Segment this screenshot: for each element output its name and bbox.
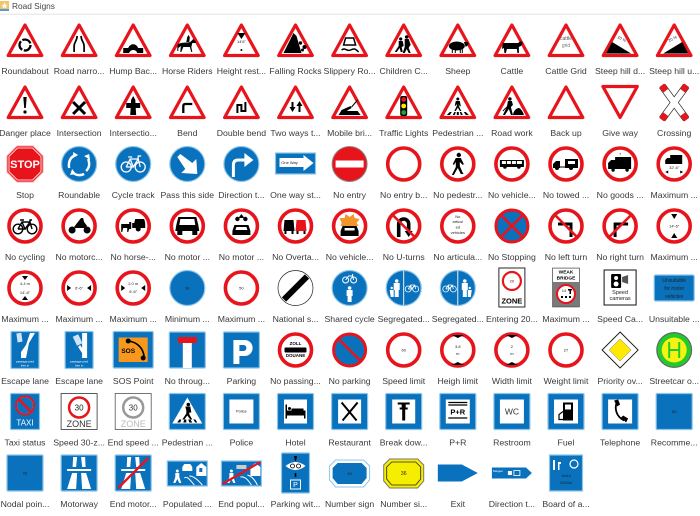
- sign: End populated area: End popul...: [218, 499, 265, 509]
- sign: Horse Riders: Horse Riders: [162, 66, 213, 76]
- sign: Escape lane right: passage pied: [70, 360, 88, 364]
- sign: Maximum height 14'6": 14'-6": [669, 224, 680, 228]
- sign: Weight limit: 27: [564, 348, 569, 352]
- sign: Direction to: [218, 146, 265, 200]
- sign: Police: Police: [236, 408, 248, 414]
- sign: Priority over: [597, 332, 643, 386]
- sign: No vehicles: [488, 148, 536, 200]
- sign: Minimum speed: [165, 270, 210, 324]
- sign: Number sign yellow: [380, 459, 427, 509]
- sign: Maximum height 14'6": Maximum ...: [651, 252, 698, 262]
- sign: Roundable: [58, 146, 100, 200]
- sign: Weight limit: [544, 334, 589, 386]
- sign: Falling Rocks: [269, 25, 322, 76]
- sign: Pedestrian crossing: [432, 87, 483, 138]
- sign: No articulated: No articula...: [433, 252, 482, 262]
- sign: Double bend: Double bend: [217, 128, 266, 138]
- sign: Height restriction: 14'6": [237, 39, 246, 44]
- sign: No articulated: vehicles: [451, 230, 465, 235]
- sign: Steep hill down: Steep hill d...: [595, 66, 645, 76]
- sign: No left turn: [545, 210, 587, 262]
- sign: Maximum speed 50: Maximum ...: [218, 314, 265, 324]
- sign: Number sign yellow: Number si...: [380, 499, 427, 509]
- sign: Height restriction: [217, 25, 266, 76]
- sign: Speed 30 zone: ZONE: [67, 419, 92, 429]
- sign: Escape lane right: free in: [75, 364, 84, 368]
- sign: No articulated: [433, 210, 482, 262]
- sign: Restaurant: Restaurant: [328, 438, 371, 448]
- sign: Segregated left: Segregated...: [378, 314, 430, 324]
- sign: Traffic Lights: Traffic Lights: [379, 128, 429, 138]
- sign: Stop: [7, 146, 43, 200]
- sign: Nodal point: Nodal poin...: [1, 499, 49, 509]
- sign: Unsuitable: [649, 275, 700, 324]
- sign: Number sign: Number sign: [325, 499, 374, 509]
- sign: No passing customs: ZOLL: [290, 341, 302, 346]
- sign: Taxi status: [4, 394, 46, 448]
- sign: Entering 20 zone: 20: [510, 278, 515, 284]
- sign: Nodal point: 28: [23, 470, 28, 476]
- sign: Number sign: 49: [347, 471, 353, 476]
- sign: No motor vehicles and motorcycles: No motor ...: [219, 252, 264, 262]
- sign: Parking with: P: [293, 482, 298, 489]
- sign: No parking: No parking: [329, 376, 371, 386]
- sign: Populated area: [163, 461, 212, 509]
- sign: Hump Back: [109, 25, 157, 76]
- sign: Board of areas: Wuhi: [561, 473, 571, 478]
- sign: SOS Point: [113, 332, 154, 386]
- sign: One way street: One Way: [281, 160, 298, 165]
- sign: Intersection: [57, 87, 102, 138]
- sign: Pedestrian crossing square: Pedestrian ...: [162, 438, 213, 448]
- sign: Road narrows: [54, 25, 104, 76]
- sign: Populated area: Populated ...: [163, 499, 212, 509]
- sign: Cattle Grid: [545, 25, 587, 76]
- sign: Escape lane right: [55, 332, 103, 386]
- sign: Police: [223, 394, 259, 448]
- sign: Speed 30 zone: Speed 30-z...: [53, 438, 105, 448]
- sign: Give way: [602, 86, 639, 138]
- sign: Maximum weak bridge: WEAK: [559, 270, 574, 276]
- sign: Nodal point: [1, 455, 49, 509]
- sign: Maximum weak bridge: [542, 268, 590, 324]
- sign: Telephone: Telephone: [600, 438, 640, 448]
- sign: No motorcycles: [55, 210, 103, 262]
- sign: Restaurant: [328, 394, 371, 448]
- sign: No parking: [329, 334, 371, 386]
- sign: Break down service: Break dow...: [380, 438, 428, 448]
- sign: Cattle: Cattle: [501, 66, 523, 76]
- sign: Unsuitable: Unsuitable: [662, 278, 686, 284]
- sign: Roundabout: [1, 25, 49, 76]
- sign: Intersection: Intersection: [57, 128, 102, 138]
- sign: Maximum weak bridge: 14: [562, 288, 567, 293]
- sign: Speed limit 60: Speed limit: [382, 376, 426, 386]
- sign: Minimum speed: Minimum ...: [165, 314, 210, 324]
- sign: No goods: 7: [619, 152, 622, 156]
- sign: No Stopping: [488, 210, 536, 262]
- sign: Steep hill up: Steep hill u...: [649, 66, 699, 76]
- sign: Priority over: Priority ov...: [597, 376, 643, 386]
- sign: Maximum width truck: 32'-6": [669, 165, 680, 170]
- sign: Stop: STOP: [10, 159, 40, 171]
- sign: Danger place: Danger place: [0, 128, 51, 138]
- sign: Break down service: [380, 394, 428, 448]
- sign: Taxi status: TAXI: [16, 418, 34, 428]
- sign: No right turn: [596, 210, 644, 262]
- icon: folder star: [0, 1, 9, 11]
- sign: End motorway: [110, 455, 157, 509]
- sign: Restroom: WC: [505, 406, 519, 416]
- sign: Cattle Grid: Cattle Grid: [545, 66, 587, 76]
- sign: Shared cycle: Shared cycle: [324, 314, 375, 324]
- sign: End speed zone: 30: [129, 404, 138, 412]
- sign: Pass this side: [160, 146, 214, 200]
- sign: Maximum 4.4 m: 14'-6": [20, 290, 31, 295]
- sign: No towed: [543, 148, 589, 200]
- sign: End speed zone: [108, 394, 159, 448]
- sign: Recommended speed: 80: [672, 409, 677, 414]
- sign: No cycling: No cycling: [5, 252, 45, 262]
- sign: Maximum width 6'-6": Maximum ...: [55, 314, 103, 324]
- sign: No entry: [332, 146, 367, 200]
- sign: No Stopping: No Stopping: [488, 252, 536, 262]
- sign: End speed zone: ZONE: [121, 419, 146, 429]
- sign: Bend: Bend: [177, 128, 198, 138]
- sign: Width limit: 2: [511, 344, 514, 349]
- sign: Fuel: Fuel: [558, 438, 575, 448]
- sign: Number sign yellow: 36: [401, 471, 407, 477]
- sign: No motor vehicles: [165, 210, 210, 262]
- sign: Pass this side: Pass this side: [160, 190, 214, 200]
- sign: Double bend: [217, 87, 266, 138]
- sign: Unsuitable: Unsuitable ...: [649, 314, 700, 324]
- sign: Exit: Exit: [451, 499, 466, 509]
- sign: Parking: [223, 332, 259, 386]
- sign: Pedestrian crossing square: [162, 394, 213, 448]
- sign: Direction to: Direction t...: [489, 499, 535, 509]
- sign: End populated area: [218, 461, 265, 509]
- sign: Board of areas: [542, 455, 590, 509]
- title: Road Signs: [12, 1, 55, 11]
- sign: One way street: [270, 153, 321, 200]
- sign: Police: Police: [230, 438, 253, 448]
- sign: SOS Point: SOS: [121, 348, 136, 355]
- sign: SOS Point: SOS Point: [113, 376, 154, 386]
- sign: Fuel: [548, 394, 584, 448]
- sign: Cattle Grid: cattle: [560, 36, 572, 42]
- sign: Steep hill down: 10 %: [617, 34, 627, 43]
- sign: Hotel: [278, 394, 314, 448]
- sign: No vehicles explosive: [326, 210, 374, 262]
- sign: No entry both: [380, 148, 427, 200]
- sign: Horse Riders: [162, 25, 213, 76]
- sign: No motor vehicles and motorcycles: [219, 210, 264, 262]
- sign: Children Crossing: [380, 25, 428, 76]
- sign: Speed Cameras: Speed Ca...: [597, 314, 643, 324]
- sign: Mobile bridge: Mobile bri...: [327, 128, 372, 138]
- sign: Road narrows: Road narro...: [54, 66, 104, 76]
- sign: Cattle: [495, 25, 529, 76]
- sign: Maximum speed 50: 50: [239, 286, 244, 290]
- sign: Escape lane left: passage pied: [16, 360, 34, 364]
- sign: Telephone: [600, 394, 640, 448]
- sign: Steep hill up: [649, 25, 699, 76]
- sign: Maximum width truck: [651, 148, 698, 200]
- sign: Height limit: m: [456, 351, 460, 356]
- sign: Roundabout: Roundabout: [1, 66, 49, 76]
- sign: Two ways traffic: Two ways t...: [270, 128, 321, 138]
- sign: No cycling: [5, 210, 45, 262]
- sign: No passing customs: [270, 334, 321, 386]
- sign: Speed 30 zone: 30: [75, 404, 84, 412]
- sign: P+R: P+R: [450, 408, 466, 416]
- sign: Segregated right: [432, 270, 484, 324]
- sign: Road work: Road work: [491, 128, 533, 138]
- sign: Maximum 4.4 m: 4.4 m: [20, 281, 31, 286]
- sign: Speed limit 60: 60: [401, 348, 407, 352]
- sign: Number sign: [325, 460, 374, 509]
- sign: Streetcar: [649, 332, 699, 386]
- sign: Speed Cameras: [597, 270, 643, 324]
- sign: No goods: No goods ...: [597, 190, 644, 200]
- sign: Unsuitable: for motor: [664, 286, 685, 292]
- sign: No motor vehicles: No motor ...: [165, 252, 210, 262]
- sign: Falling Rocks: Falling Rocks: [269, 66, 322, 76]
- sign: Height restriction: Height rest...: [217, 66, 266, 76]
- sign: Board of areas: 1000m: [560, 480, 573, 485]
- sign: Width limit: [492, 334, 533, 386]
- sign: P+R: P+R: [449, 438, 466, 448]
- sign: Crossing: [657, 85, 692, 138]
- sign: Cycle track: Cycle track: [112, 190, 155, 200]
- sign: Recommended speed: Recomme...: [651, 438, 698, 448]
- sign: No goods: [597, 148, 644, 200]
- sign: Streetcar: Streetcar o...: [649, 376, 699, 386]
- sign: Entering 20 zone: [486, 268, 538, 324]
- sign: Mobile bridge: [327, 87, 372, 138]
- sign: Direction to: Direction t...: [218, 190, 265, 200]
- sign: Sheep: [441, 25, 475, 76]
- sign: No right turn: No right turn: [596, 252, 644, 262]
- sign: Road work: [491, 87, 533, 138]
- sign: No articulated: articul: [452, 219, 463, 224]
- sign: Maximum weak bridge: BRIDGE: [557, 276, 576, 282]
- sign: Speed limit 60: [382, 334, 426, 386]
- sign: Bend: [170, 87, 204, 138]
- sign: Maximum height 14'6": [651, 210, 698, 262]
- sign: End speed zone: End speed ...: [108, 438, 159, 448]
- sign: Maximum width 2.0 m: Maximum ...: [110, 314, 157, 324]
- sign: Hump Back: Hump Bac...: [109, 66, 157, 76]
- sign: Entering 20 zone: ZONE: [501, 296, 522, 306]
- sign: No Overtaking: No Overta...: [272, 252, 319, 262]
- sign: One way street: One way st...: [270, 190, 321, 200]
- sign: Steep hill down: [595, 25, 645, 76]
- sign: No motorcycles: No motorc...: [55, 252, 103, 262]
- sign: Width limit: m: [510, 351, 514, 356]
- sign: No through road: No throug...: [165, 376, 210, 386]
- sign: Motorway: Motorway: [60, 499, 99, 509]
- sign: Steep hill up: 20 %: [667, 34, 678, 43]
- sign: No articulated: ed: [456, 224, 460, 230]
- sign: End motorway: End motor...: [110, 499, 157, 509]
- sign: Maximum weak bridge: Maximum ...: [542, 314, 590, 324]
- sign: National speed limit: National s...: [273, 314, 318, 324]
- sign: Pedestrian crossing: Pedestrian ...: [432, 128, 483, 138]
- sign: Children Crossing: Children C...: [380, 66, 428, 76]
- sign: Maximum width truck: Maximum ...: [651, 190, 698, 200]
- sign: Parking with: [271, 453, 320, 509]
- sign: Roundable: Roundable: [58, 190, 100, 200]
- sign: No pedestrians: No pedestr...: [433, 190, 482, 200]
- sign: Escape lane left: free in: [21, 364, 29, 368]
- sign: Two ways traffic: [270, 87, 321, 138]
- sign: Direction to: [489, 468, 535, 509]
- sign: Speed Cameras: cameras: [610, 296, 631, 302]
- sign: Intersection with priority: Intersectio...: [110, 128, 157, 138]
- sign: No towed: No towed ...: [543, 190, 589, 200]
- sign: No passing customs: DOUANE: [286, 353, 305, 358]
- sign: Exit: [438, 464, 478, 509]
- sign: Parking with: Parking wit...: [271, 499, 320, 509]
- sign: Slippery Road: [324, 25, 376, 76]
- sign: Give way: Give way: [602, 128, 639, 138]
- sign: Board of areas: Board of a...: [542, 499, 590, 509]
- sign: No vehicles: No vehicle...: [488, 190, 536, 200]
- sign: Cattle Grid: grid: [562, 43, 570, 49]
- sign: Maximum width 2.0 m: 6'-6": [129, 289, 138, 294]
- sign: Unsuitable: vehicles: [665, 294, 684, 300]
- sign: Back up: Back up: [550, 128, 582, 138]
- sign: Sheep: Sheep: [445, 66, 471, 76]
- sign: Maximum width 2.0 m: 2.0 m: [128, 281, 139, 286]
- sign: Entering 20 zone: Entering 20...: [486, 314, 538, 324]
- sign: No U-turns: No U-turns: [383, 252, 425, 262]
- sign: Weight limit: Weight limit: [544, 376, 589, 386]
- sign: Maximum 4.4 m: [1, 272, 49, 324]
- sign: Maximum 4.4 m: Maximum ...: [1, 314, 49, 324]
- sign: No vehicles explosive: No vehicle...: [326, 252, 374, 262]
- sign: Taxi status: Taxi status: [4, 438, 46, 448]
- sign: No entry both: No entry b...: [380, 190, 427, 200]
- sign: Back up: [549, 87, 583, 138]
- sign: Segregated right: Segregated...: [432, 314, 484, 324]
- sign: National speed limit: [273, 270, 318, 324]
- sign: P+R: [440, 394, 476, 448]
- sign: No passing customs: No passing...: [270, 376, 321, 386]
- sign: Escape lane right: Escape lane: [55, 376, 103, 386]
- sign: Maximum width 6'-6": 6'-6": [75, 286, 84, 290]
- sign: Parking: Parking: [227, 376, 256, 386]
- sign: No Overtaking: [272, 210, 319, 262]
- sign: Direction to: Steigen: [493, 469, 503, 473]
- sign: No horse-drawn: No horse-...: [111, 252, 156, 262]
- sign: No horse-drawn: [111, 210, 156, 262]
- sign: Width limit: Width limit: [492, 376, 533, 386]
- sign: Hotel: Hotel: [285, 438, 306, 448]
- sign: Recommended speed: [651, 394, 698, 448]
- sign: No entry: No entry: [333, 190, 367, 200]
- sign: Shared cycle: [324, 270, 375, 324]
- sign: Crossing: Crossing: [657, 128, 692, 138]
- sign: Speed Cameras: Speed: [612, 290, 628, 296]
- sign: Height limit: 3.8: [455, 344, 461, 349]
- sign: Maximum width 6'-6": [55, 272, 103, 324]
- sign: No articulated: No: [455, 214, 461, 219]
- sign: Traffic Lights: [379, 87, 429, 138]
- sign: Slippery Road: Slippery Ro...: [324, 66, 376, 76]
- title bar: [0, 1, 700, 15]
- sign: Restroom: Restroom: [493, 438, 531, 448]
- sign: Escape lane left: [1, 332, 49, 386]
- sign: No U-turns: [383, 210, 425, 262]
- sign: Restroom: [493, 394, 531, 448]
- sign: Minimum speed: 30: [185, 286, 190, 290]
- sign: Stop: Stop: [16, 190, 34, 200]
- sign: Speed 30 zone: [53, 394, 105, 448]
- sign: Motorway: [60, 455, 99, 509]
- sign: Escape lane left: Escape lane: [1, 376, 49, 386]
- sign: Maximum width 2.0 m: [110, 272, 157, 324]
- sign: No left turn: No left turn: [545, 252, 587, 262]
- sign: Height limit: Heigh limit: [438, 376, 479, 386]
- sign: Height limit: [438, 334, 479, 386]
- sign: No through road: [165, 332, 210, 386]
- sign: No pedestrians: [433, 148, 482, 200]
- sign: Danger place: [0, 87, 51, 138]
- sign: Maximum speed 50: [218, 272, 265, 324]
- sign: Cycle track: [112, 146, 155, 200]
- sign: Intersection with priority: [110, 87, 157, 138]
- sign: Segregated left: [378, 270, 430, 324]
